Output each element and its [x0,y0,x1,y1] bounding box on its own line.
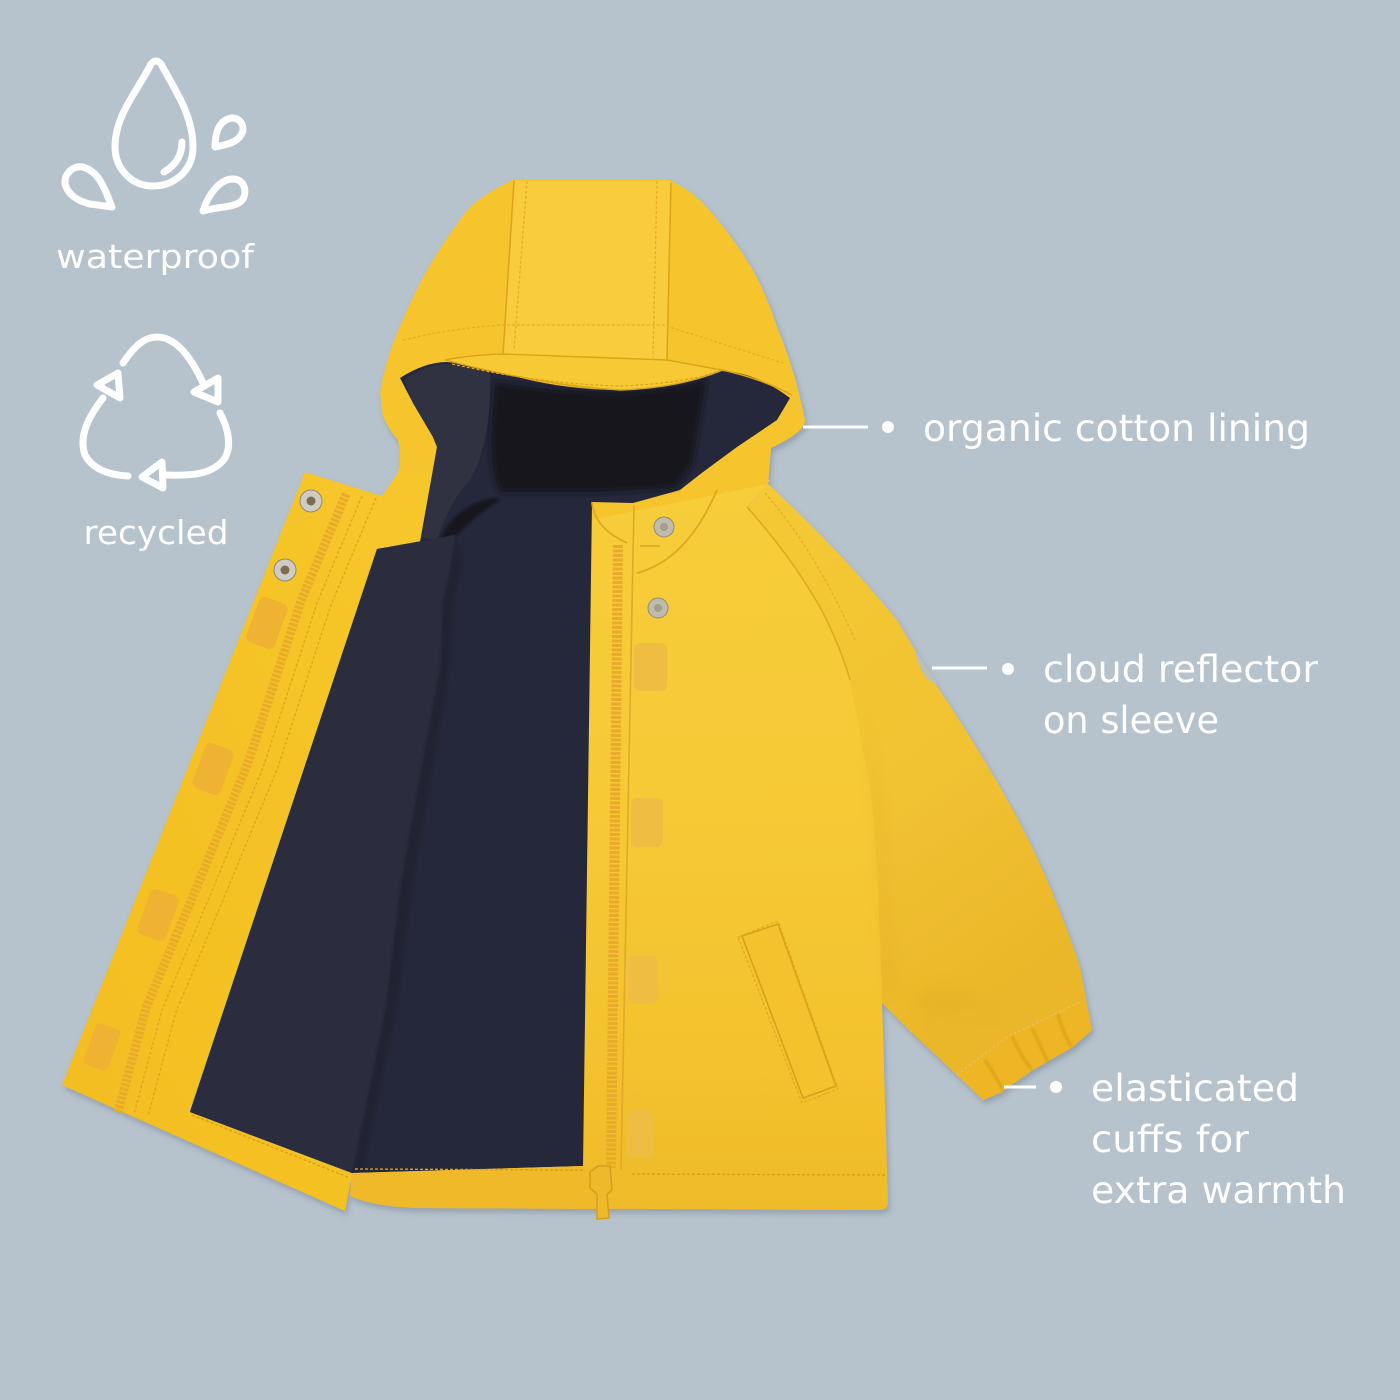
hood centre panel [503,181,670,360]
zipper left [118,494,346,1112]
brim stitching [452,364,716,386]
lining left fold [190,535,455,1173]
callout: elasticated cuffs for extra warmth [1004,1067,1346,1212]
callout: elasticated cuffs for extra warmth: cuffs for [1091,1118,1250,1161]
cuff gathers [985,1014,1072,1090]
sleeve seam [747,507,850,680]
hood panel stitches [403,181,783,363]
snap buttons right [648,517,674,618]
zipper right [611,545,618,1168]
snap buttons left [274,490,322,581]
inner hood shadow [491,380,706,492]
hood brim seam [722,370,792,395]
callout: cloud reflector on sleeve: on sleeve [1043,699,1219,742]
left front panel [62,470,434,1211]
sleeve seam stitches [765,493,855,640]
hood seams [503,181,671,360]
label: recycled: recycled [84,513,228,552]
sleeve and body fold shading [856,700,995,1025]
icon: water drops [65,61,245,211]
velcro patches right [627,643,667,1158]
callout: cloud reflector on sleeve: cloud reflector [1043,648,1319,691]
collar seams [592,490,717,573]
zipper pull [590,1166,612,1219]
body front [350,480,888,1210]
sleeve [745,483,1092,1100]
cuff [957,1002,1092,1100]
label: waterproof: waterproof [56,237,256,276]
right placket seam [621,505,634,1170]
jacket [62,180,1092,1219]
hood shell [380,180,805,545]
hood lining left side [404,364,490,540]
velcro patches left [82,595,289,1072]
hood lining shadow gap [440,498,500,540]
left placket seams [134,496,362,1114]
pocket [738,921,838,1103]
callout: cloud reflector on sleeve [932,648,1319,742]
lining fold shadow [354,540,462,1172]
cloud reflector [915,650,938,685]
icon: recycle arrows [83,337,229,488]
lining [190,362,790,1173]
jacket silhouette group [62,180,1092,1211]
hem stitches [192,1115,885,1178]
callout: elasticated cuffs for extra warmth: extra warmth [1091,1169,1346,1212]
callout: elasticated cuffs for extra warmth: elasticated [1091,1067,1299,1110]
callout: organic cotton lining: organic cotton lining [923,407,1310,450]
hood brim [445,354,722,390]
hem colour strip [350,1166,595,1209]
cuff stitching [957,1002,1080,1075]
